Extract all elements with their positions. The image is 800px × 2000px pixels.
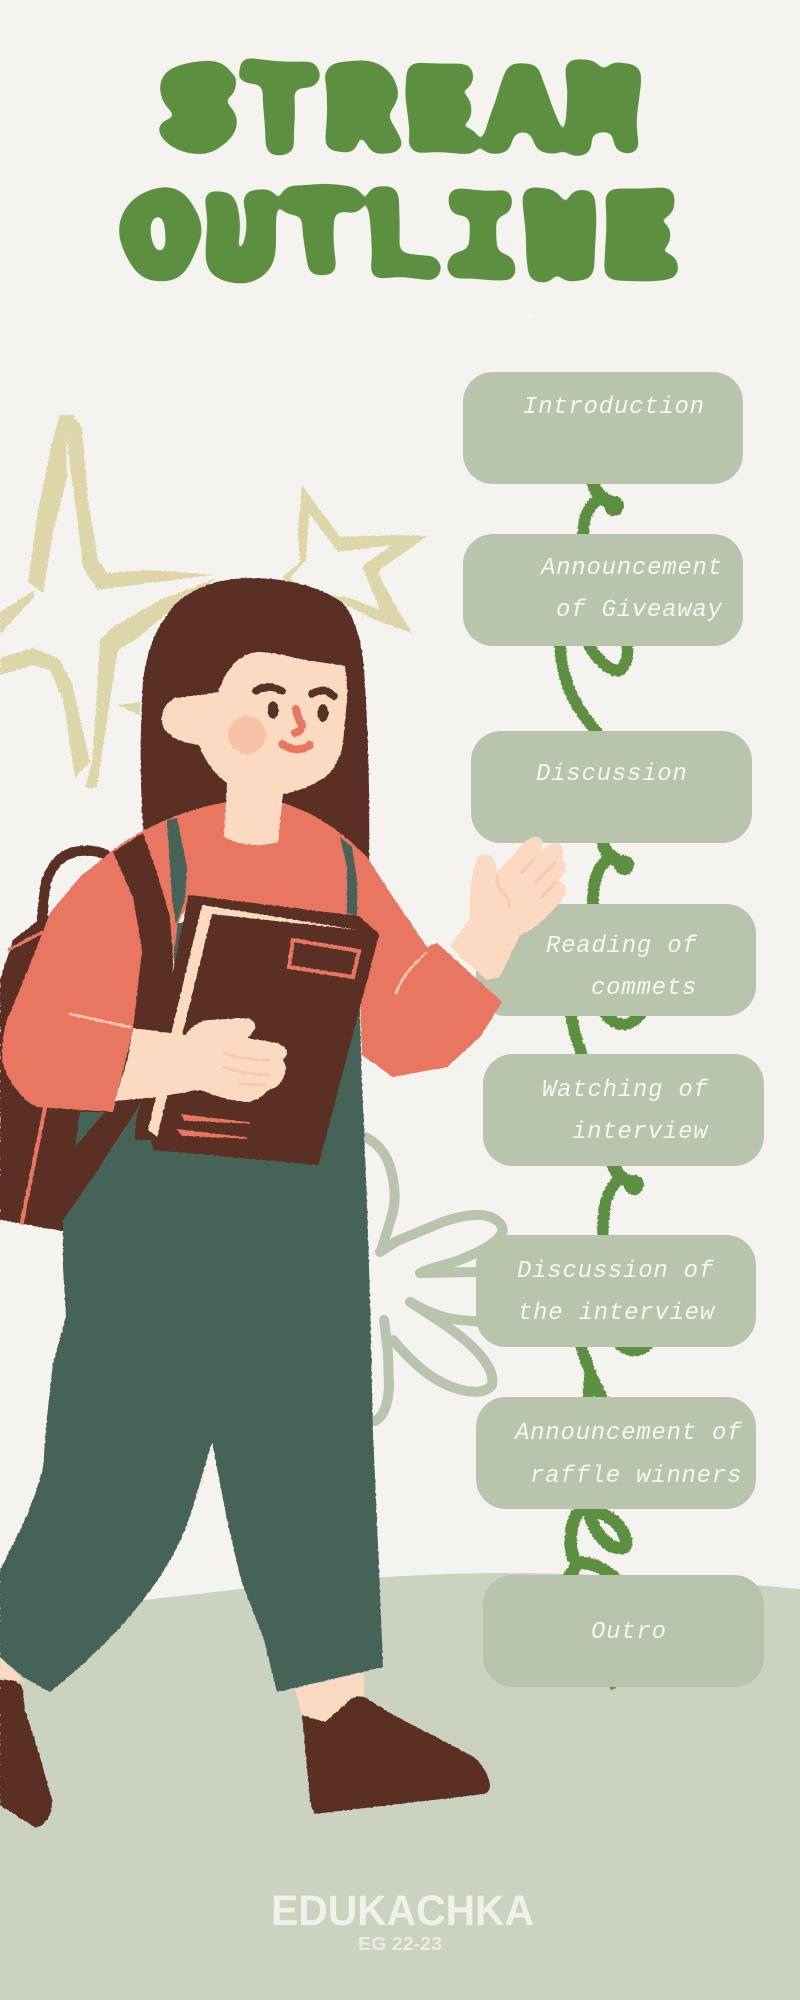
box: watching of interview: Watching of bbox=[542, 1077, 709, 1104]
title: E bbox=[605, 176, 675, 308]
box: discussion bbox=[471, 731, 752, 843]
title: N bbox=[525, 176, 595, 308]
vine: raffle to outro bbox=[567, 1506, 626, 1690]
overall straps bbox=[167, 818, 357, 925]
vine: discussion to comments bbox=[593, 840, 630, 910]
overalls and trousers bbox=[0, 917, 383, 1692]
box: reading of comments: Reading of bbox=[546, 933, 698, 960]
footer subtitle: EG 22-23 bbox=[358, 1934, 442, 1954]
icon: flower outline bbox=[365, 1137, 503, 1421]
hair bbox=[141, 578, 369, 860]
box: watching of interview bbox=[483, 1054, 764, 1166]
shin sliver bbox=[195, 1460, 207, 1503]
neck and face bbox=[162, 652, 347, 845]
title: T bbox=[244, 41, 314, 171]
sparkle dot bbox=[528, 314, 532, 318]
box: discussion of the interview: Discussion of bbox=[517, 1258, 714, 1285]
title: T bbox=[286, 168, 356, 298]
book bbox=[137, 897, 377, 1163]
cheek bbox=[228, 716, 266, 754]
sleeve creases bbox=[70, 953, 427, 1027]
title: I bbox=[446, 176, 516, 308]
left ankle and shoe bbox=[0, 1657, 52, 1828]
title: S bbox=[163, 49, 233, 181]
raised hand bbox=[450, 837, 566, 980]
box: watching of interview: interview bbox=[572, 1119, 709, 1146]
arm and hand holding book bbox=[115, 1018, 287, 1102]
title: M bbox=[568, 49, 638, 181]
icon: small sparkle star bbox=[283, 485, 428, 633]
box: discussion of the interview bbox=[476, 1235, 756, 1347]
cuff bbox=[420, 943, 502, 1024]
title: O bbox=[125, 176, 195, 308]
eyebrows bbox=[256, 687, 334, 696]
character: student with backpack and book bbox=[0, 578, 566, 1828]
nose and mouth bbox=[282, 709, 310, 749]
box: announcement of raffle winners bbox=[476, 1397, 756, 1509]
box: outro: Outro bbox=[591, 1619, 667, 1646]
vine: introduction to giveaway bbox=[583, 480, 620, 540]
box: discussion of the interview: the interview bbox=[518, 1300, 716, 1327]
backpack bbox=[0, 851, 175, 1231]
icon: large sparkle star bbox=[0, 415, 217, 788]
box: discussion: Discussion bbox=[536, 761, 688, 788]
right ankle and shoe bbox=[295, 1672, 490, 1814]
vine: discussion to raffle bbox=[580, 1343, 647, 1402]
ground hill bbox=[0, 1573, 800, 2000]
eyes bbox=[268, 702, 328, 722]
title: U bbox=[205, 176, 275, 308]
box: announcement of giveaway bbox=[463, 534, 743, 646]
vine: giveaway to discussion bbox=[560, 640, 627, 736]
vine: interview to discussion bbox=[603, 1162, 640, 1240]
footer brand: EDUKACHKA bbox=[271, 1887, 534, 1935]
box: announcement of raffle winners: Announcement of bbox=[513, 1420, 742, 1447]
box: announcement of giveaway: Announcement bbox=[539, 555, 723, 582]
title: A bbox=[488, 49, 558, 181]
box: outro bbox=[483, 1575, 764, 1687]
title: L bbox=[368, 168, 438, 298]
vine: comments to interview bbox=[570, 1010, 642, 1060]
box: announcement of giveaway: of Giveaway bbox=[556, 597, 723, 624]
box: announcement of raffle winners: raffle winners bbox=[530, 1463, 742, 1490]
box: reading of comments bbox=[476, 904, 756, 1016]
title bbox=[125, 41, 675, 308]
vines bbox=[560, 480, 647, 1690]
backpack strap bbox=[113, 833, 173, 1030]
shirt bbox=[2, 802, 502, 1112]
title: R bbox=[325, 49, 395, 181]
box: reading of comments: commets bbox=[591, 975, 697, 1002]
box: introduction bbox=[463, 372, 743, 484]
title: E bbox=[406, 49, 476, 181]
box: introduction: Introduction bbox=[523, 394, 705, 421]
